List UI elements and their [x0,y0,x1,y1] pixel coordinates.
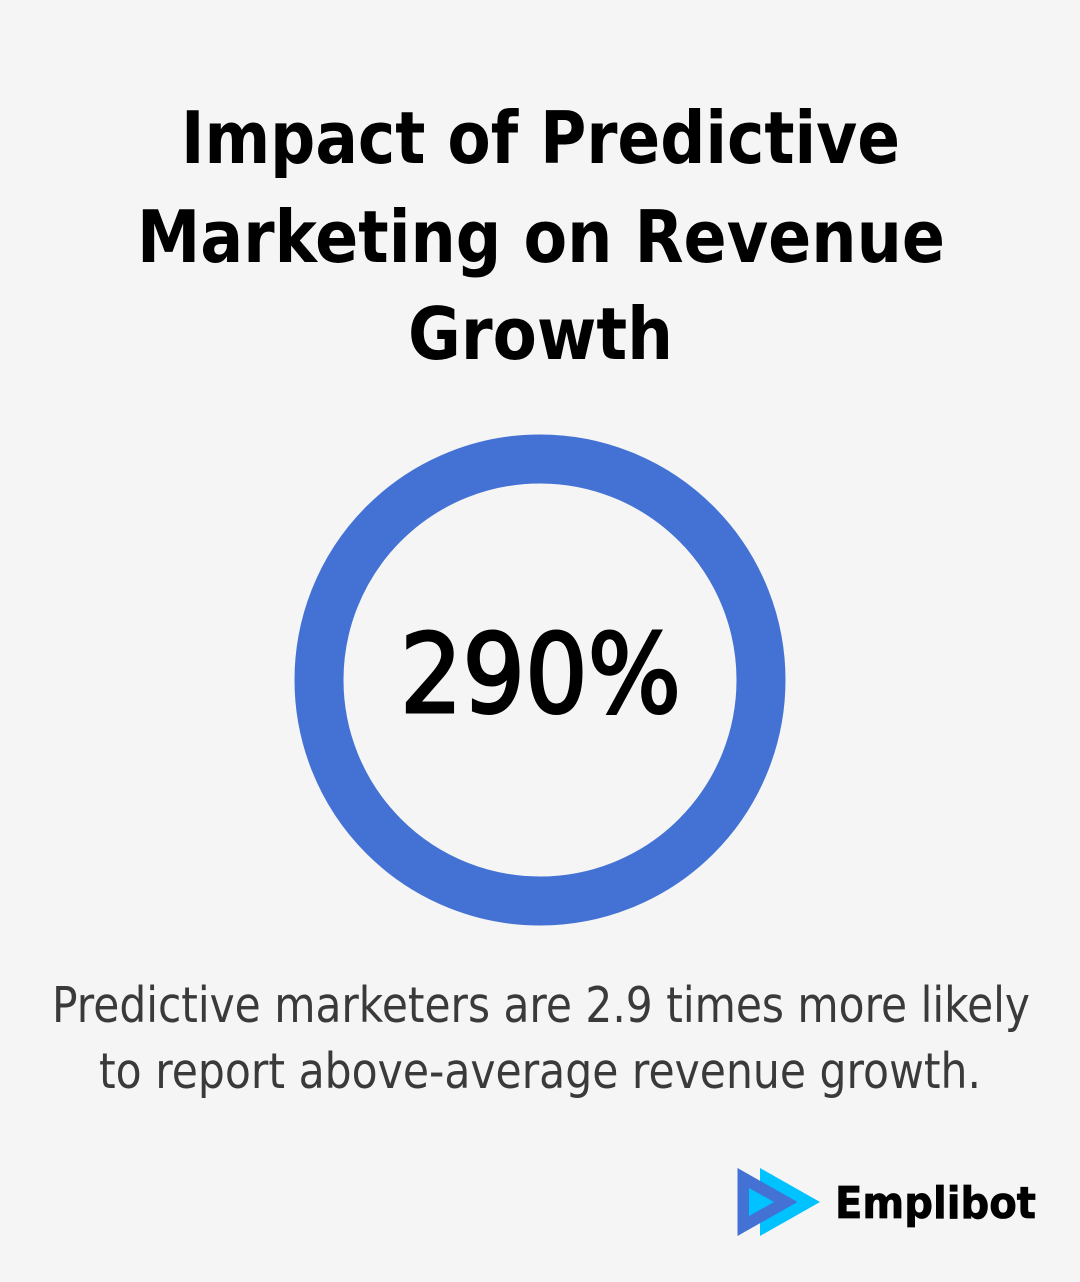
title: Marketing on Revenue [137,195,945,279]
logo: Emplibot [738,1168,1036,1236]
title: Growth [408,292,673,376]
logo wordmark: Emplibot [835,1178,1036,1229]
title: Impact of Predictive [181,96,900,180]
title [137,96,945,376]
ring value: 290% [400,611,681,738]
description text [52,977,1030,1100]
icon: play triangles [738,1168,820,1236]
ring chart [319,459,761,901]
